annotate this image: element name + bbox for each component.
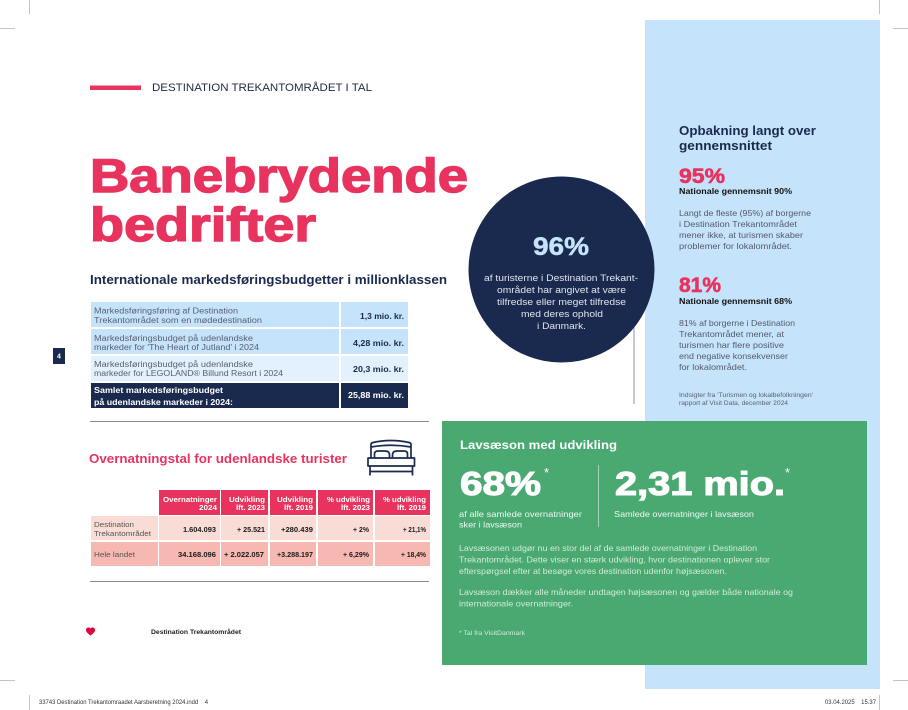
print slug: 03.04.2025 15.37 [825,700,877,706]
table: marketing budgets: 4,28 mio. kr. [353,339,404,348]
table: overnight stays: lft. 2019 [284,505,313,512]
footer brand: Destination Trekantområdet [151,628,242,636]
stat: 81%: end negative konsekvenser [679,351,788,361]
heading: overnight stays: Overnatningstal for udenlandske turister [89,452,347,466]
footnote: * Tal fra VisitDanmark [459,631,526,637]
callout circle: 96%: tilfredse eller meget tilfredse [497,297,626,307]
callout circle: 96%: i Danmark. [537,321,586,331]
stat: 68%: 68% [460,465,541,502]
callout circle: 96%: 96% [533,233,589,261]
title [90,149,468,251]
table: overnight stays: % udvikling [383,497,426,504]
page number: 4 [57,354,61,360]
stat: 95% [679,165,811,251]
stat: 2,31 mio.: 2,31 mio. [615,465,785,502]
callout circle: 96%: området har angivet at være [497,285,626,295]
table: marketing budgets: 25,88 mio. kr. [348,391,404,400]
stat: 2,31 mio. [614,465,790,519]
table: marketing budgets: Markedsføringsbudget på udenlandske [94,360,254,369]
stat: 81% [679,274,795,372]
table: overnight stays: Hele landet [94,550,136,559]
heading: support above average: gennemsnittet [679,139,773,153]
section label: DESTINATION TREKANTOMRÅDET I TAL [152,81,372,94]
stat: 95%: 95% [679,165,725,188]
stat: 81%: Nationale gennemsnit 68% [679,297,792,306]
heading: support above average [679,124,816,153]
stat: 81%: 81% [679,274,721,297]
table: marketing budgets: på udenlandske markeder i 2024: [94,398,233,407]
callout circle: 96%: med deres ophold [521,309,603,319]
stat: 95%: i Destination Trekantområdet [679,219,798,229]
table: overnight stays [91,490,430,566]
text block: low season description: Lavsæsonen udgør nu en stor del af de samlede overnatninger i Destination [459,543,757,553]
table: marketing budgets: 20,3 mio. kr. [353,365,404,374]
table: marketing budgets: Markedsføringsbudget på udenlandske [94,334,254,343]
text block: low season description: efterspørgsel efter at besøge vores destination udenfor højsæsonen. [459,566,727,576]
heading: low season: Lavsæson med udvikling [460,438,617,452]
footer brand [86,628,242,636]
stat: 81%: for lokalområdet. [679,362,747,372]
table: marketing budgets: markeder for 'The Heart of Jutland' i 2024 [94,343,260,352]
stat: 68%: * [544,465,549,480]
panel: low season [442,421,867,665]
table: overnight stays: +3.288.197 [277,550,313,559]
panel: light blue side column [645,20,880,689]
print slug: 33743 Destination Trekantomraadet Aarsberetning 2024.indd 4 [39,700,209,706]
table: marketing budgets: Markedsføringsføring af Destination [94,306,238,316]
stat: 95%: Nationale gennemsnit 90% [679,187,792,196]
table: overnight stays: Overnatninger [163,497,217,504]
heading: support above average: Opbakning langt over [679,124,816,138]
source note: rapport af Visit Data, december 2024 [679,401,789,407]
table: marketing budgets: Trekantområdet som en mødedestination [94,316,262,325]
table: overnight stays: lft. 2019 [397,505,426,512]
table: overnight stays: Udvikling [229,497,265,504]
source note [679,393,813,407]
section label [90,81,372,94]
stat: 2,31 mio.: * [785,465,790,480]
text block: low season description: internationale overnatninger. [459,598,573,608]
stat: 68%: af alle samlede overnatninger [459,509,582,519]
stat: 81%: 81% af borgerne i Destination [679,318,795,328]
stat: 95%: Langt de fleste (95%) af borgerne [679,208,811,218]
table: overnight stays: 1.604.093 [183,525,216,534]
print slug [39,700,877,706]
table: overnight stays: + 6,29% [343,550,369,559]
table: overnight stays: Trekantområdet [94,529,152,538]
title: Banebrydende [90,149,468,202]
table: overnight stays: lft. 2023 [341,505,370,512]
source note: Indsigter fra 'Turismen og lokalbefolkningen' [679,393,813,399]
table: marketing budgets: markeder for LEGOLAND® Billund Resort i 2024 [94,369,284,378]
stat: 95%: problemer for lokalområdet. [679,241,792,251]
title: bedrifter [90,198,316,251]
heading: marketing budgets: Internationale markedsføringsbudgetter i millionklassen [90,273,447,287]
table: overnight stays: Udvikling [277,497,313,504]
table: overnight stays: % udvikling [327,497,370,504]
table: overnight stays: + 2% [353,525,369,534]
table: overnight stays: lft. 2023 [236,505,265,512]
table: overnight stays: Destination [94,520,134,529]
stat: 95%: mener ikke, at turismen skaber [679,230,803,240]
table: marketing budgets [91,302,408,408]
stat: 68% [459,465,582,530]
table: overnight stays: + 25.521 [237,525,265,534]
stat: 2,31 mio.: Samlede overnatninger i lavsæson [614,509,754,519]
table: overnight stays: + 21,1% [403,525,426,534]
stat: 81%: turismen har flere positive [679,340,784,350]
icon: bed [368,440,414,476]
page number [53,348,65,364]
table: overnight stays: 2024 [199,505,217,512]
table: overnight stays: + 18,4% [401,550,426,559]
text block: low season description [459,543,793,608]
table: marketing budgets: 1,3 mio. kr. [360,312,404,321]
stat: 81%: Trekantområdet mener, at [679,329,785,339]
table: overnight stays: 34.168.096 [178,550,216,559]
table: overnight stays: + 2.022.057 [224,550,264,559]
callout circle: 96% [468,176,654,362]
text block: low season description: Lavsæson dækker alle måneder undtagen højsæsonen og gælder både nationale og [459,587,793,597]
text block: low season description: Trekantområdet. Dette viser en stærk udvikling, hvor destinationen oplever stor [459,554,770,564]
table: overnight stays: +280.439 [281,525,313,534]
callout circle: 96%: af turisterne i Destination Trekant- [484,273,638,283]
table: marketing budgets: Samlet markedsføringsbudget [94,386,223,395]
stat: 68%: sker i lavsæson [459,520,522,530]
